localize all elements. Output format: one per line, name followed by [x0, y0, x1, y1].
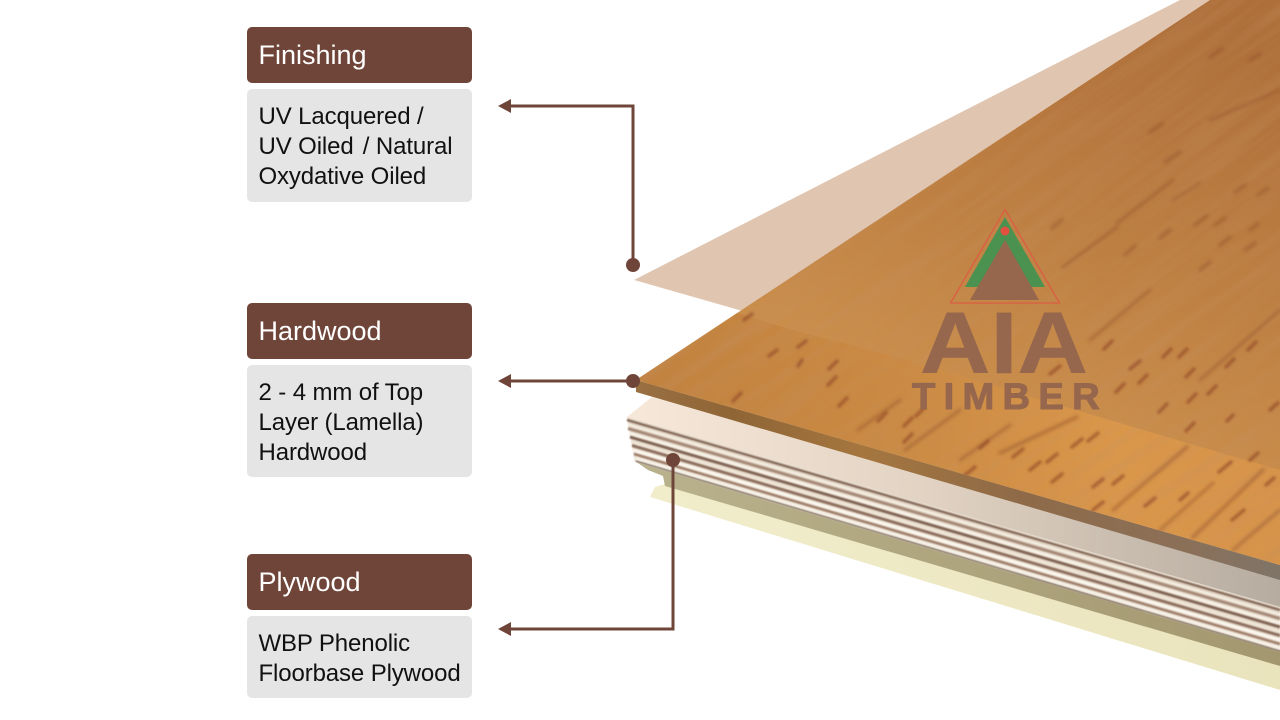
- text block: finishing details: [247, 89, 472, 202]
- hardwood top surface: [630, 0, 1280, 570]
- logo wordmark TIMBER: TIMBER: [912, 376, 1108, 417]
- panel: finishing: [247, 27, 472, 202]
- long soft streaks: [858, 90, 1280, 550]
- heading: hardwood: [247, 303, 472, 359]
- AIA Timber watermark logo: [912, 210, 1108, 417]
- heading: finishing: Finishing: [258, 40, 367, 70]
- logo wordmark AIA: AIA: [920, 295, 1088, 392]
- text block: plywood details: WBP Phenolic Floorbase Plywood: [258, 630, 461, 687]
- heading: plywood: [247, 554, 472, 610]
- tongue of the plywood: [650, 484, 1280, 690]
- heading: plywood: Plywood: [258, 567, 361, 597]
- lower planks: [630, 313, 1280, 570]
- heading: finishing: [247, 27, 472, 83]
- panel: plywood: [247, 554, 472, 698]
- text block: hardwood details: 2 - 4 mm of Top Layer (Lamella) Hardwood: [258, 379, 423, 466]
- upper planks: [630, 0, 1280, 570]
- wood grain: [706, 6, 1280, 360]
- text block: plywood details: [247, 616, 472, 698]
- faint upper pores: [1052, 49, 1268, 270]
- hardwood side edge: [636, 380, 1280, 580]
- text block: finishing details: UV Lacquered / UV Oiled / Natural Oxydative Oiled: [258, 103, 452, 190]
- panel: hardwood: [247, 303, 472, 477]
- logo red dot: [1000, 226, 1010, 236]
- groove shadow: [635, 461, 1280, 666]
- plywood core face: [627, 417, 1280, 652]
- heading: hardwood: Hardwood: [258, 316, 382, 346]
- finishing layer sheet: [634, 0, 1280, 316]
- logo brown triangle: [970, 240, 1039, 300]
- core top strip: [627, 397, 1280, 607]
- connector: hardwood: [498, 374, 640, 388]
- text block: hardwood details: [247, 365, 472, 477]
- connector: plywood: [498, 453, 680, 636]
- logo outline triangle: [950, 210, 1060, 303]
- logo green chevron: [965, 217, 1045, 287]
- connector: finishing: [498, 99, 640, 272]
- short pore dashes: [733, 314, 1278, 520]
- illustration: flooring layers and connectors: [498, 0, 1280, 690]
